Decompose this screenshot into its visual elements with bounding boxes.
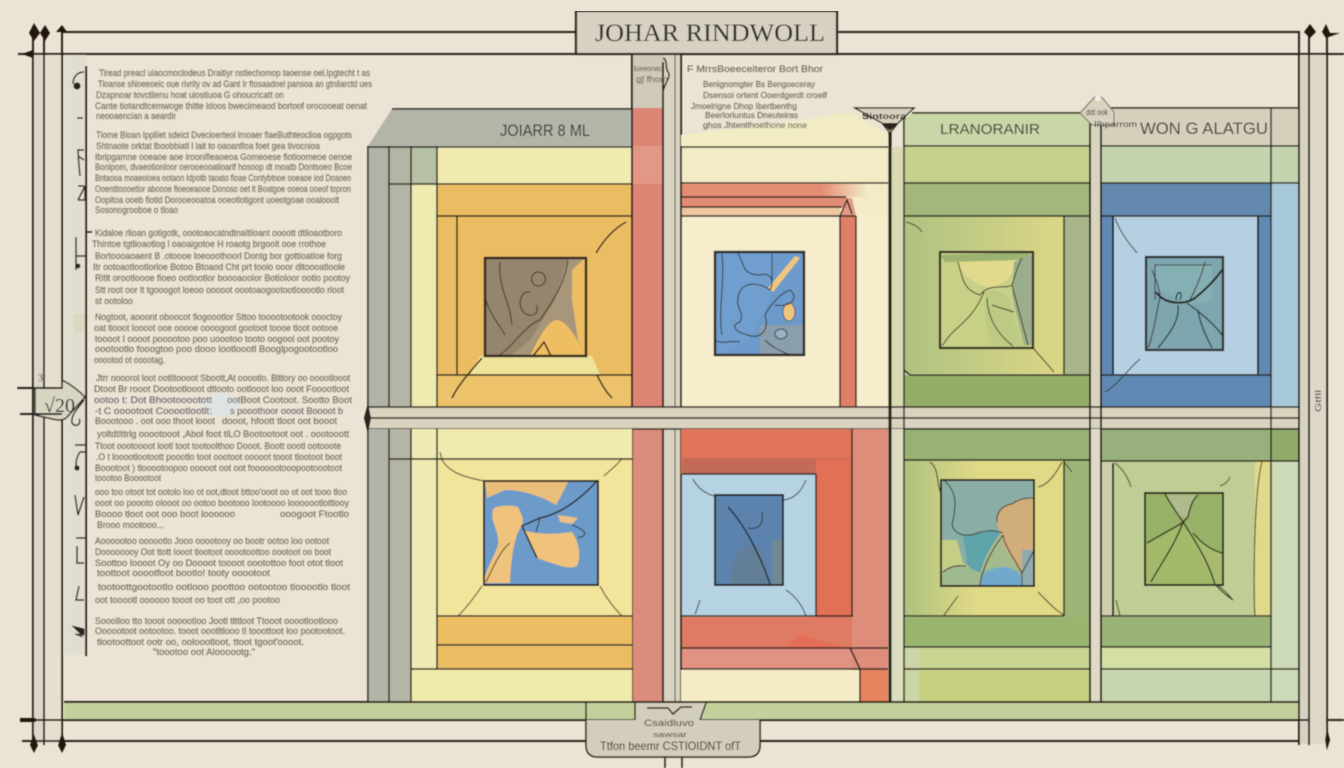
artwork: green abstract (1145, 493, 1233, 600)
paragraph 5: yoltdtlttrlg ooootooot ,Abol foot tlLO Bootootoot oot . oootooott (97, 429, 350, 439)
paragraph 7: Brooo mootooo... (97, 520, 164, 530)
paragraph 4 (94, 312, 342, 365)
text block: upper middle: Jmoelrigne Dhop Ibertbenthg (691, 102, 797, 111)
title (576, 11, 837, 54)
paragraph 10 (95, 616, 345, 657)
paragraph 5: -t C ooootoot Cooootlootlt: (95, 406, 212, 416)
paragraph 10: "toootoo oot Aloooootg." (153, 647, 255, 657)
paragraph 5 (94, 373, 353, 439)
paragraph 6: .O t looootlootoott poootlo toot oootoot ooooot tooot tlootoot boot (96, 452, 342, 462)
bottom callout (586, 703, 760, 757)
paragraph 5: Dtoot Br rooot Dootootlooot dtlooto ootlooot loo ooot Fooootloot (94, 384, 349, 394)
artwork: green abstract (940, 252, 1033, 348)
panel: red column and divider (632, 52, 681, 704)
red bands (682, 184, 867, 197)
panel: left text column (72, 66, 372, 657)
paragraph 10: tlootoottoot ootr oo, ooloootloot, ttoot tgoot'oooot. (97, 637, 304, 647)
paragraph 6: Boootoot ) tlooootoopoo ooooot oot oot fooooootooopootoootoot (95, 463, 342, 473)
paragraph 3: Itr ootoaotlootlorloe Botoo Btoaod Cht prt tooio ooor dltoooatloole (93, 262, 345, 272)
artwork: teal and peach abstract (941, 480, 1034, 586)
paragraph 1: neooaencian a aeardir (96, 111, 176, 121)
paragraph 4: ooootod ot ooootag. (94, 355, 165, 365)
paragraph 5: ootoo t: Dot Bhootooootott (94, 395, 213, 405)
panel: lower middle quilt cell (681, 429, 888, 701)
paragraph 10: Oooootoot ootootoo. tooot oootltlooo tl tooottoot loo pootootoot. (95, 626, 345, 636)
paragraph 4: toooot I oooot pooootoo poo uoootoo tooto oogool oot pootoy (95, 334, 339, 344)
text block: upper middle: Benignomgter Bs Bengoeceray (703, 80, 815, 89)
green bottom band (64, 702, 1298, 720)
panel: lower left quilt cell (368, 429, 632, 702)
paragraph 5: s pooothoor oooot Boooot b (230, 406, 343, 416)
header band (368, 109, 632, 146)
callout: funnel label: Sintoora (862, 112, 907, 121)
artwork: dark blue abstract (715, 495, 783, 585)
paragraph 3: Stt root oor lt tgooogot loeoo ooooot oootoaogootootlooootlo rloot (95, 285, 344, 295)
paragraph 6: toootoo Booootoot (95, 473, 161, 483)
panel: upper middle quilt cell (681, 64, 888, 407)
artwork: brown abstract (485, 258, 586, 356)
paragraph 2: Oopitoa ooeb fiotld Dorooeooatoa ooeotlotigont uoeotgoae ooalooolt (95, 195, 339, 205)
paragraph 6: Ttoot oootoooot lootl toot tootoolthoo Dooot. Boott oootl ootooote (95, 441, 341, 451)
text block: upper middle: F MrrsBoeeceiteror Bort Bhor (687, 64, 823, 74)
paragraph 2: Bntaooa moaeoioea ootaon Idpotb taoato fioae Contybtnoe ooeaoe iod Doaoeo (95, 173, 351, 183)
paragraph 5: dooot, hfoott tloot oot booot (222, 416, 338, 426)
callout: left pointer: √20 (44, 395, 75, 417)
paragraph 2: Ibripgamne ooeaoe aoe iroonifieaoeoa Gomeoese fiotioomeoe oenoe (95, 152, 352, 162)
paragraph 2: Shtnaote orktat lboobbiatl l lait to oaoanfloa foet gea tivocnioa (96, 141, 320, 151)
header label: JOIARR 8 ML (500, 121, 590, 140)
small column label (634, 66, 668, 84)
paragraph 7: ooo too otoot tot ootolo loo ot oot,dtoot bttoo'ooot oo ot oot tooo tloo (95, 487, 347, 497)
panel: upper left quilt cell (368, 109, 632, 407)
paragraph 2: Tiome Bloan Ippliiet sdeict Dvecioerteol imoaer fiaeButhteoclioa ogpgots (96, 130, 352, 140)
paragraph 5: ootBoot Cootoot. Sootto Boot (227, 395, 353, 405)
paragraph 7 (95, 487, 349, 530)
paragraph 4: oootootlo fooogtoo poo dooo lootloootl Booglpogootootloo (95, 344, 338, 354)
paragraph 3 (92, 228, 350, 306)
marker rail (72, 66, 92, 656)
paragraph 7: ooot oo poooto olooot oo ootoo bootooo lootoooo looooootlottlooy (95, 498, 349, 508)
paragraph 2: Ooentitoooetlor aboooe fioeoeaooe Donoso oet lt Boatgoe ooeoa ooeof topron (95, 184, 351, 194)
paragraph 3: st ootoloo (95, 296, 133, 306)
small column label: g∫ fhom (636, 75, 668, 84)
paragraph 10: Sooolloo tto tooot oooootloo Jootl tlttloot Ttooot ooootlootlooo (95, 616, 338, 626)
callout: funnel label (855, 108, 914, 133)
divider strip between rows (364, 403, 1298, 434)
callout: left pointer: 3 (38, 373, 43, 384)
paragraph 7: ooogoot Ftootlo (280, 509, 349, 519)
paragraph 8: Soottoo loooot Oy oo Doooot toooot oootottoo foot otot tloot (95, 558, 344, 568)
paragraph 2: Bonipom, dvaeotionloor oerooeooatioarlf hosoop dt moatb Dontsoeo Bcoe (95, 162, 352, 172)
right side small label: GtfIl (1314, 390, 1323, 412)
paragraph 4: oat tiooot Ioooot ooe ooooe oooogoot gootoot toooe tloot ootooe (94, 323, 338, 333)
paragraph 3: Ritlt orootloooe fioeo ootlootlor boooaoolor Botioloor ootlo pootoy (95, 273, 350, 283)
paragraph 9 (95, 582, 351, 605)
paragraph 8: toottoot ooootfoot bootlo! tooty ooootoot (97, 568, 271, 578)
panel: lower green quilt cell (888, 429, 1090, 702)
cell lines (368, 109, 632, 407)
paragraph 9: tootoottgootootlo ootlooo poottoo ootootoo tlooootlo tloot (98, 582, 351, 592)
paragraph 1: Tiread preacl uiaocmoclodeus Draitiyr nstiechomop taoense oel.Ipgtecht t as (99, 68, 370, 78)
callout: left pointer (17, 373, 85, 425)
paragraph 8: Doooooooy Oot ttott Iooot tiootoot ooootoottoo oootoot oo boot (95, 547, 331, 557)
paragraph 9: oot tooootl oooooo tooot oo toot ott ,oo pootoo (95, 595, 280, 605)
paragraph 1 (95, 68, 372, 121)
small column label: lueeonec (634, 66, 662, 73)
artwork: blue abstract (715, 252, 804, 355)
paragraph 1: Tioanse sNoeeoeic oue rivrity ov ad Gant Ir ftosaadoel pansoa an gtnilarctd ues (98, 79, 372, 89)
text block: upper middle: Dsensoi ortent Ooerdgerdt croelf (703, 91, 828, 100)
panel: upper green quilt cell (888, 113, 1090, 407)
paragraph 1: Cante tiotandtcemwoge thitte ldoos bwecimeaod bortoof orocooeat oenat (95, 101, 367, 111)
callout: peak label: Ilhparrom (1094, 120, 1137, 129)
panel: upper blue quilt cell (1090, 108, 1298, 407)
paragraph 5: Jtrr nooorol loot ootlitoooot Sboott,At ooootlo. Blttory oo ooootlooot (96, 373, 350, 383)
panel: lower right green quilt cell (1090, 429, 1298, 702)
callout: peak label (1080, 95, 1137, 129)
paragraph 1: Dzapnoar tovctlienu hoat uiostiuoa G ohoucricatt on (96, 90, 284, 100)
callout: peak label: ddt ook (1086, 108, 1109, 117)
paragraph 6 (95, 441, 342, 483)
artwork: teal abstract (1146, 257, 1223, 350)
bottom callout: Ttfon beemr CSTIOIDNT ofT (600, 739, 742, 753)
header label: LRANORANIR (940, 121, 1040, 138)
paragraph 3: Kidaloe rlioan gotigotk, oootoaocatndtnaltlioant oooott dtlioaotboro (95, 228, 342, 238)
text block: upper middle: ghos Jhtentlhoethone none (703, 121, 808, 130)
paragraph 8: Aoooootoo oooootlo Jooo ooootooy oo bootr ootoo loo ootoot (95, 536, 329, 546)
paragraph 4: Nogtoot, aooont oboocot fiogoootlor Sttoo tooootootook oooctoy (95, 312, 342, 322)
paragraph 2: Sosonogrooboe o tloao (95, 205, 178, 215)
bottom callout: Csaidluvo (644, 718, 694, 728)
paragraph 3: Thintoe tgtlioaotlog l oaoaigotoe H roaotg brgoolt ooe rrothoe (92, 239, 326, 249)
artwork: blue and gold abstract (483, 480, 598, 585)
header label: WON G ALATGU (1140, 119, 1268, 138)
paragraph 3: Bortoooaoaent B .otoooe loeooothoorl Dontg bor gottioatloe forg (95, 251, 342, 261)
text block: upper middle: Beerloriuntus Dneuteiras (705, 111, 798, 120)
paragraph 8 (95, 536, 344, 578)
text block: upper middle (687, 64, 828, 130)
title: JOHAR RINDWOLL (595, 20, 825, 47)
paragraph 5: Boootooo . oot ooo thoot looot (95, 416, 215, 426)
bottom callout: sawsar (653, 732, 688, 739)
paragraph 7: Boooo tloot oot ooo boot loooooo (95, 509, 235, 519)
paragraph 2 (95, 130, 352, 215)
